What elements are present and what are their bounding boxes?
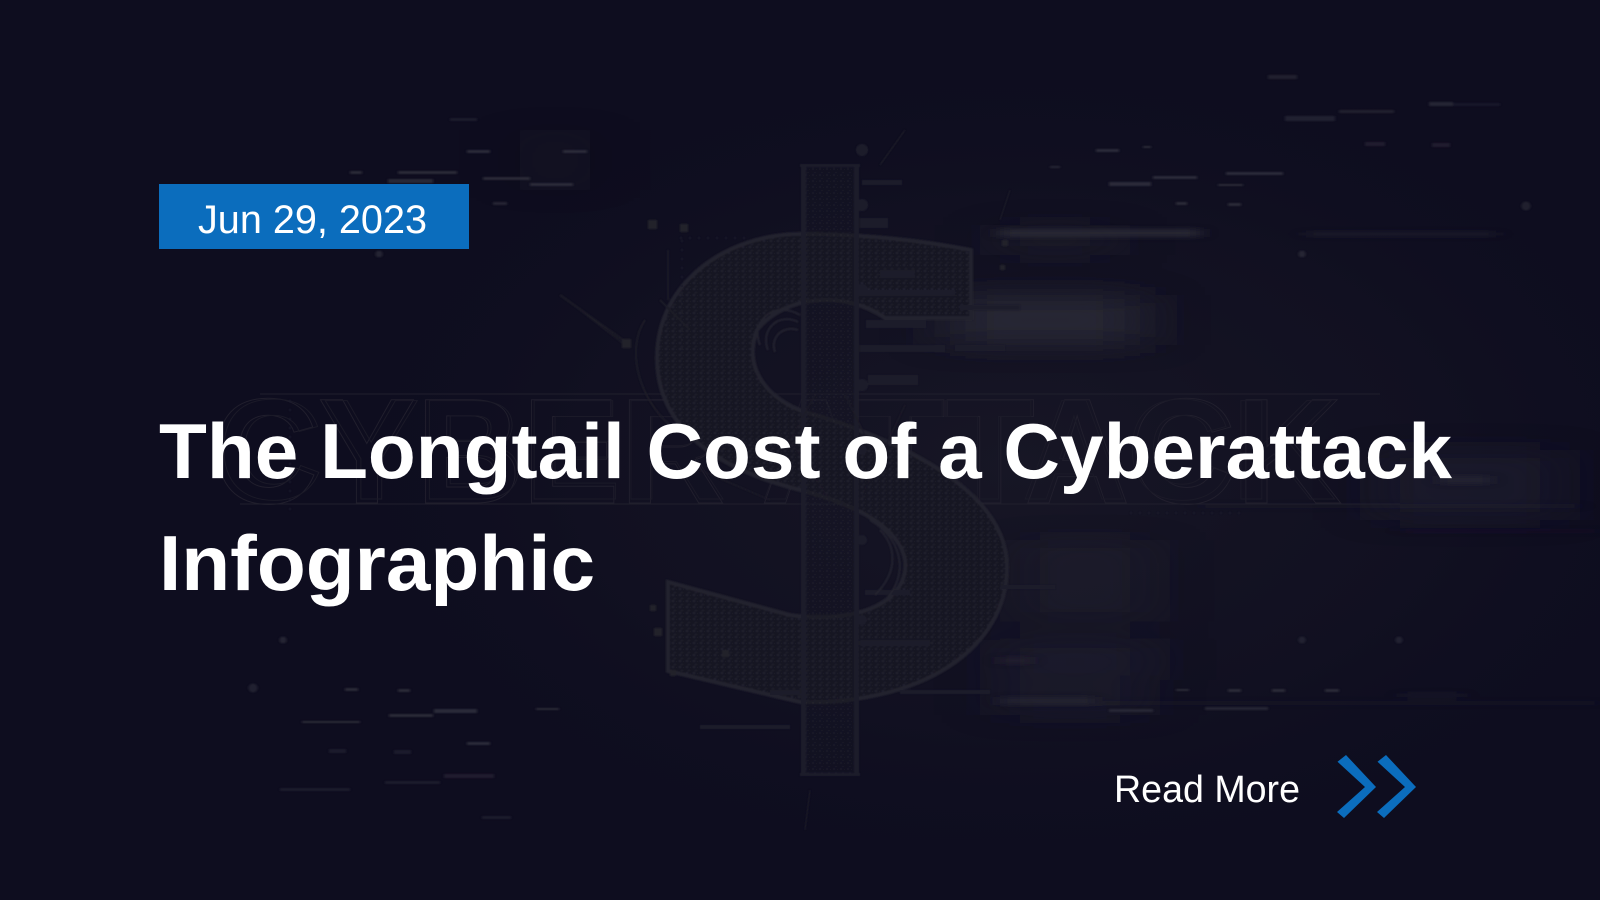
dollar sign: upper-left ghost edge bbox=[560, 250, 690, 425]
title: The Longtail Cost of a Cyberattack bbox=[159, 407, 1453, 495]
background glow streaks bbox=[520, 130, 1560, 715]
outline background word: cyber attack: CYBER ATTACK bbox=[212, 367, 1342, 535]
date badge bbox=[159, 184, 469, 249]
read more link bbox=[1114, 755, 1416, 818]
read more link: Read More bbox=[1114, 769, 1300, 811]
crisp glitch streaks bbox=[248, 75, 1530, 819]
outline background word: cyber attack: CYBER ATTACK bbox=[218, 371, 1336, 530]
dollar sign background graphic bbox=[290, 130, 1240, 830]
title: Infographic bbox=[159, 519, 595, 607]
dollar sign: inner circuit arcs bbox=[758, 310, 900, 605]
background haze bbox=[300, 60, 1600, 840]
dollar sign: diagonal scratches bbox=[580, 130, 1010, 830]
dollar sign: dotted guide lines bbox=[290, 238, 1240, 513]
date badge: Jun 29, 2023 bbox=[198, 198, 427, 242]
soft horizontal streaks bbox=[1000, 229, 1600, 705]
dollar sign: square pixels bbox=[622, 220, 1008, 676]
dollar sign: vertical bar bbox=[806, 164, 854, 776]
dollar sign: splatter fragments bbox=[700, 144, 1055, 729]
title bbox=[159, 407, 1453, 607]
icon: double chevron arrow bbox=[1337, 755, 1416, 818]
dollar sign: textured S body bbox=[657, 234, 1007, 702]
